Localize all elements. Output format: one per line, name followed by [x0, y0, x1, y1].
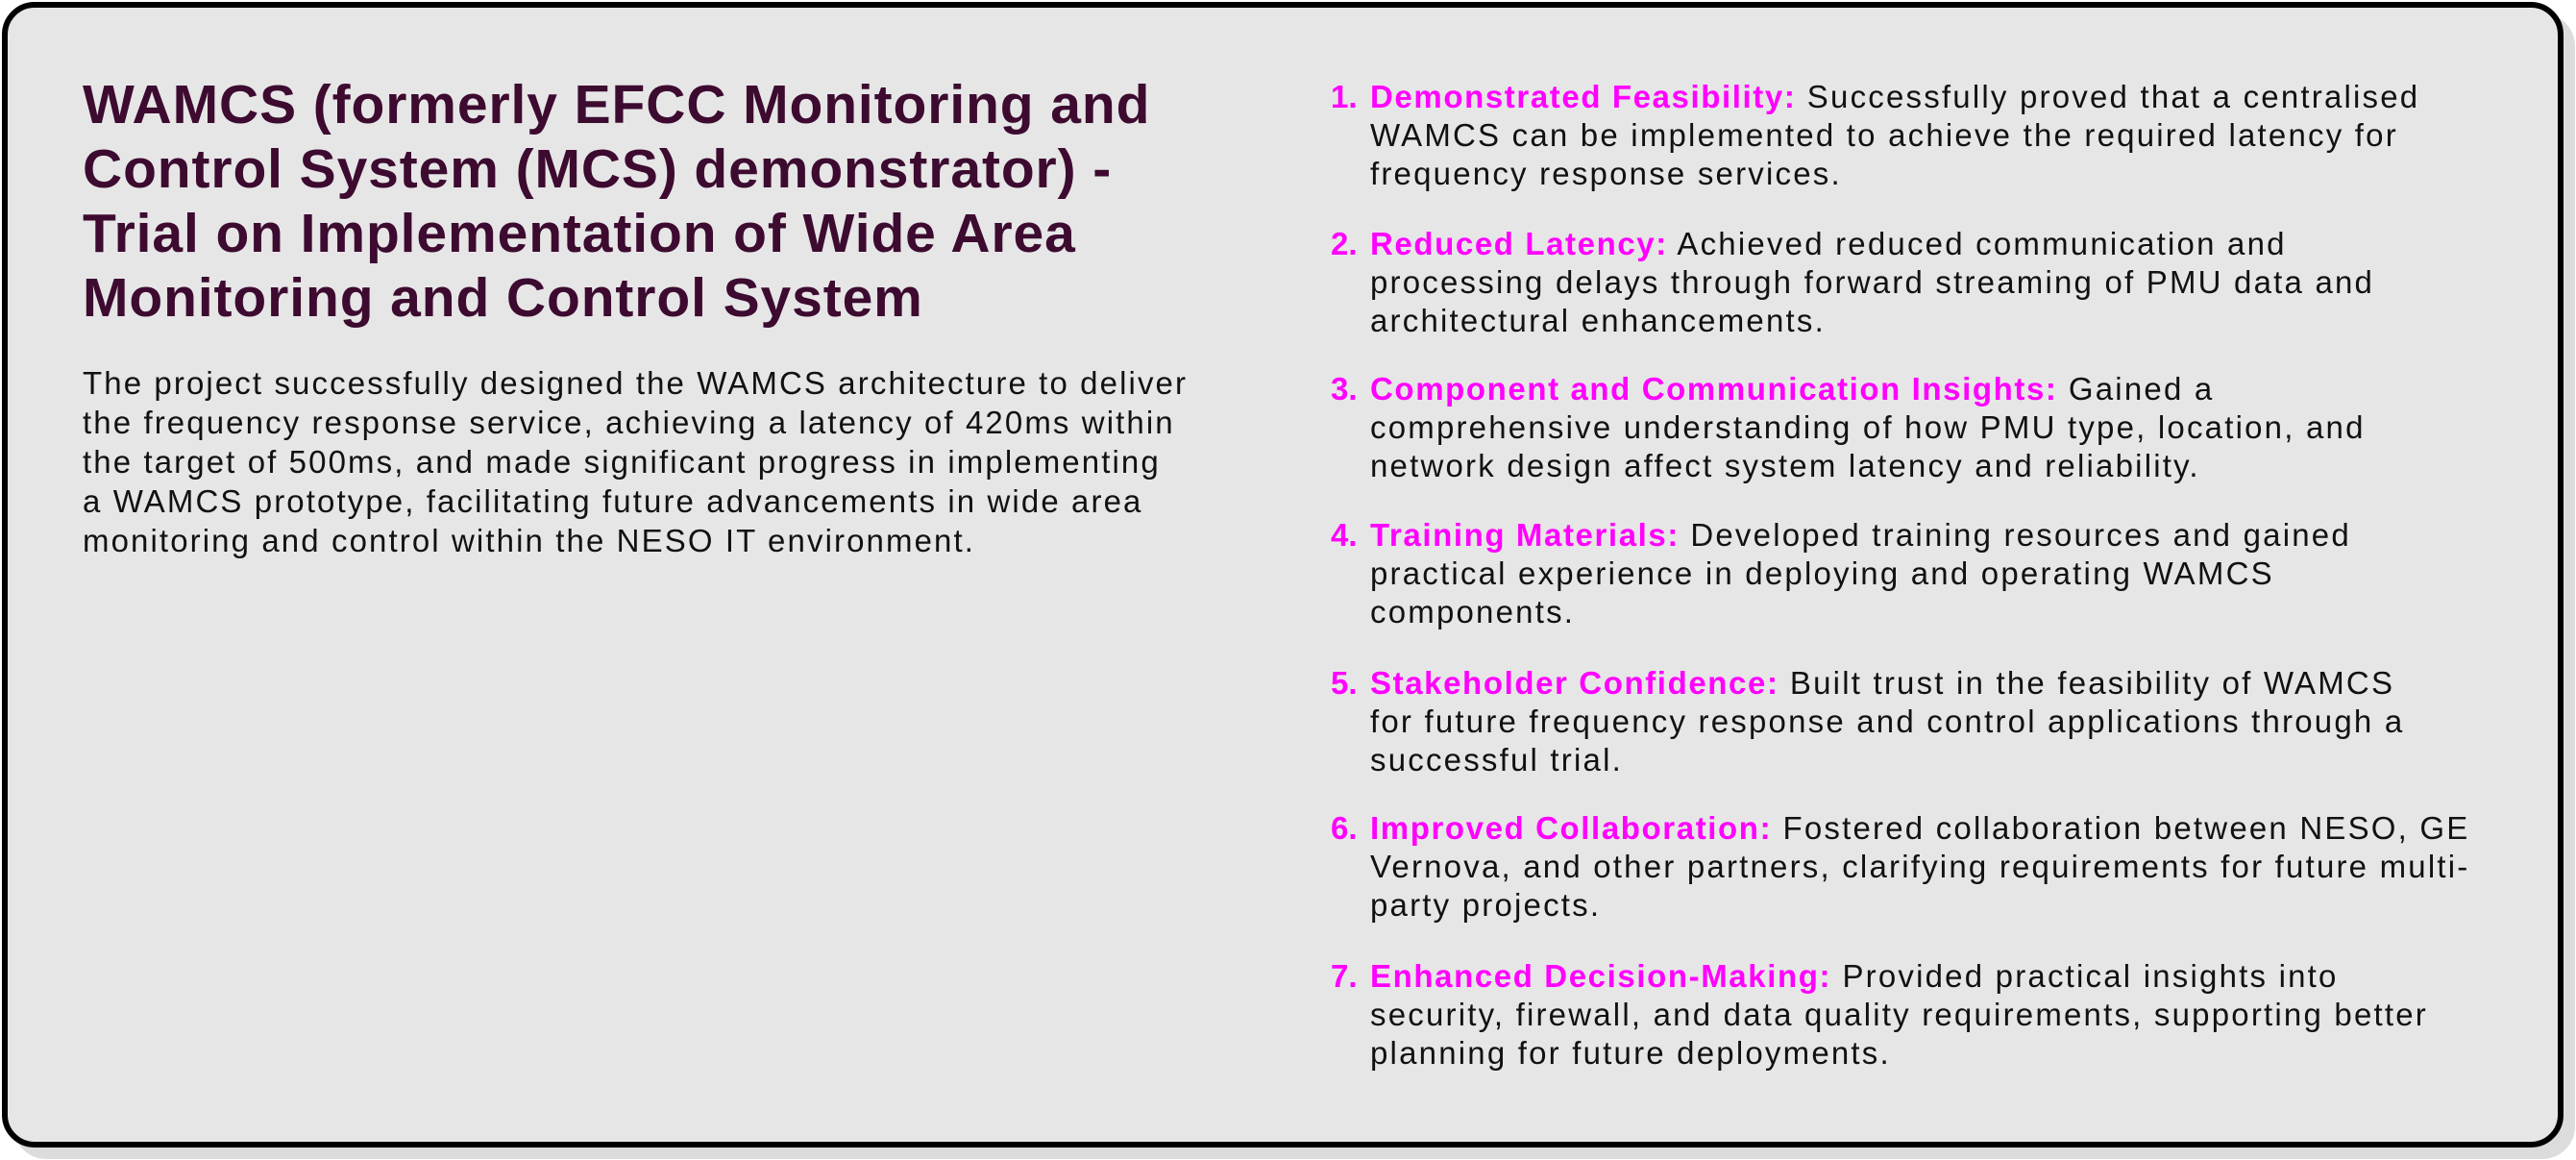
list item 7: security, firewall, and data quality requirements, supporting better [1370, 997, 2428, 1032]
list item 4: components. [1370, 594, 1575, 629]
text block: summary: a WAMCS prototype, facilitating future advancements in wide area [83, 483, 1142, 519]
list item 6: Vernova, and other partners, clarifying requirements for future multi- [1370, 849, 2469, 884]
list item 1: Demonstrated Feasibility: Successfully proved that a centralised [1370, 79, 2419, 114]
title: Control System (MCS) demonstrator) - [83, 138, 1112, 200]
text block: summary: the frequency response service, achieving a latency of 420ms within [83, 405, 1175, 440]
list item 7: 7. [1331, 958, 1358, 994]
list item 2 [1331, 226, 2374, 338]
list item 1 [1331, 79, 2419, 191]
list item 3 [1331, 371, 2366, 483]
list item 4: 4. [1331, 517, 1358, 553]
title: WAMCS (formerly EFCC Monitoring and [83, 74, 1150, 136]
title: Monitoring and Control System [83, 267, 923, 329]
list item 5: for future frequency response and control applications through a [1370, 703, 2404, 739]
list item 4: practical experience in deploying and operating WAMCS [1370, 555, 2274, 591]
text block: summary: The project successfully designed the WAMCS architecture to deliver [83, 365, 1188, 401]
text block: summary [83, 365, 1188, 558]
list item 2: Reduced Latency: Achieved reduced communication and [1370, 226, 2287, 261]
list item 5: Stakeholder Confidence: Built trust in the feasibility of WAMCS [1370, 665, 2394, 701]
list item 5: successful trial. [1370, 742, 1623, 777]
list item 3: comprehensive understanding of how PMU type, location, and [1370, 409, 2366, 445]
list item 7 [1331, 958, 2428, 1071]
title [83, 74, 1150, 329]
list item 1: frequency response services. [1370, 156, 1842, 191]
list item 1: 1. [1331, 79, 1358, 114]
list item 3: Component and Communication Insights: Gained a [1370, 371, 2214, 407]
list item 2: architectural enhancements. [1370, 303, 1826, 338]
list item 6: party projects. [1370, 887, 1601, 923]
text block: summary: the target of 500ms, and made significant progress in implementing [83, 444, 1161, 480]
list item 7: Enhanced Decision-Making: Provided practical insights into [1370, 958, 2339, 994]
title: Trial on Implementation of Wide Area [83, 203, 1076, 264]
list item 6: Improved Collaboration: Fostered collaboration between NESO, GE [1370, 810, 2469, 846]
list item 5: 5. [1331, 665, 1358, 701]
list item 2: processing delays through forward streaming of PMU data and [1370, 264, 2374, 300]
list item 3: network design affect system latency and reliability. [1370, 448, 2200, 483]
list item 1: WAMCS can be implemented to achieve the required latency for [1370, 117, 2398, 153]
list item 4: Training Materials: Developed training resources and gained [1370, 517, 2351, 553]
list item 6 [1331, 810, 2469, 923]
list item 6: 6. [1331, 810, 1358, 846]
list item 4 [1331, 517, 2351, 629]
list item 3: 3. [1331, 371, 1358, 407]
list item 7: planning for future deployments. [1370, 1035, 1891, 1071]
text block: summary: monitoring and control within the NESO IT environment. [83, 523, 975, 558]
list item 5 [1331, 665, 2404, 777]
list item 2: 2. [1331, 226, 1358, 261]
